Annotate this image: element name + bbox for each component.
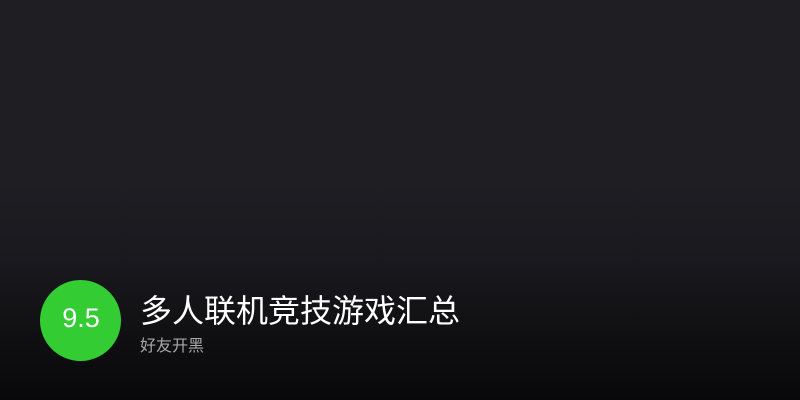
score badge background — [40, 280, 121, 361]
title: 多人联机竞技游戏汇总 — [140, 286, 460, 332]
score badge: 9.5: 9.5 — [62, 303, 100, 333]
subtitle: 好友开黑 — [140, 338, 204, 355]
